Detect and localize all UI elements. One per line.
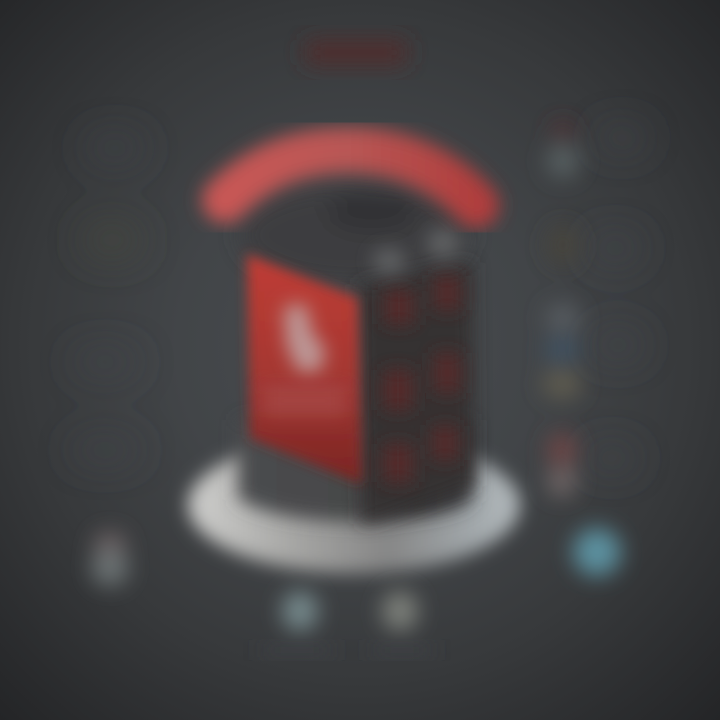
icon: pink grey [547,468,577,496]
panel caption [262,385,347,417]
right icons [542,122,582,496]
red arch [225,150,476,205]
panel symbol [284,304,326,372]
icon: red top [551,122,575,138]
base ring [188,437,520,573]
tower dark side [358,262,474,525]
base platform [188,420,520,573]
icon: bottom left [282,591,318,631]
left column text blocks [69,136,145,460]
icon: blue [544,337,580,363]
box top [240,185,470,285]
icon: grey circle [546,144,580,178]
icon: tan [542,369,582,399]
icon: red [547,432,577,468]
bottom captions [262,645,432,655]
icon: left bottom [91,531,129,586]
icon: bottom right [382,591,418,631]
top grey cubes [372,228,460,274]
icon: teal circle [573,528,621,576]
red squares on dark side [383,276,460,482]
base cylinder [238,420,472,522]
icon: olive [547,225,579,265]
red front panel [247,254,362,484]
icon: grey [545,303,581,333]
right column text blocks [586,128,648,468]
title [305,40,407,65]
